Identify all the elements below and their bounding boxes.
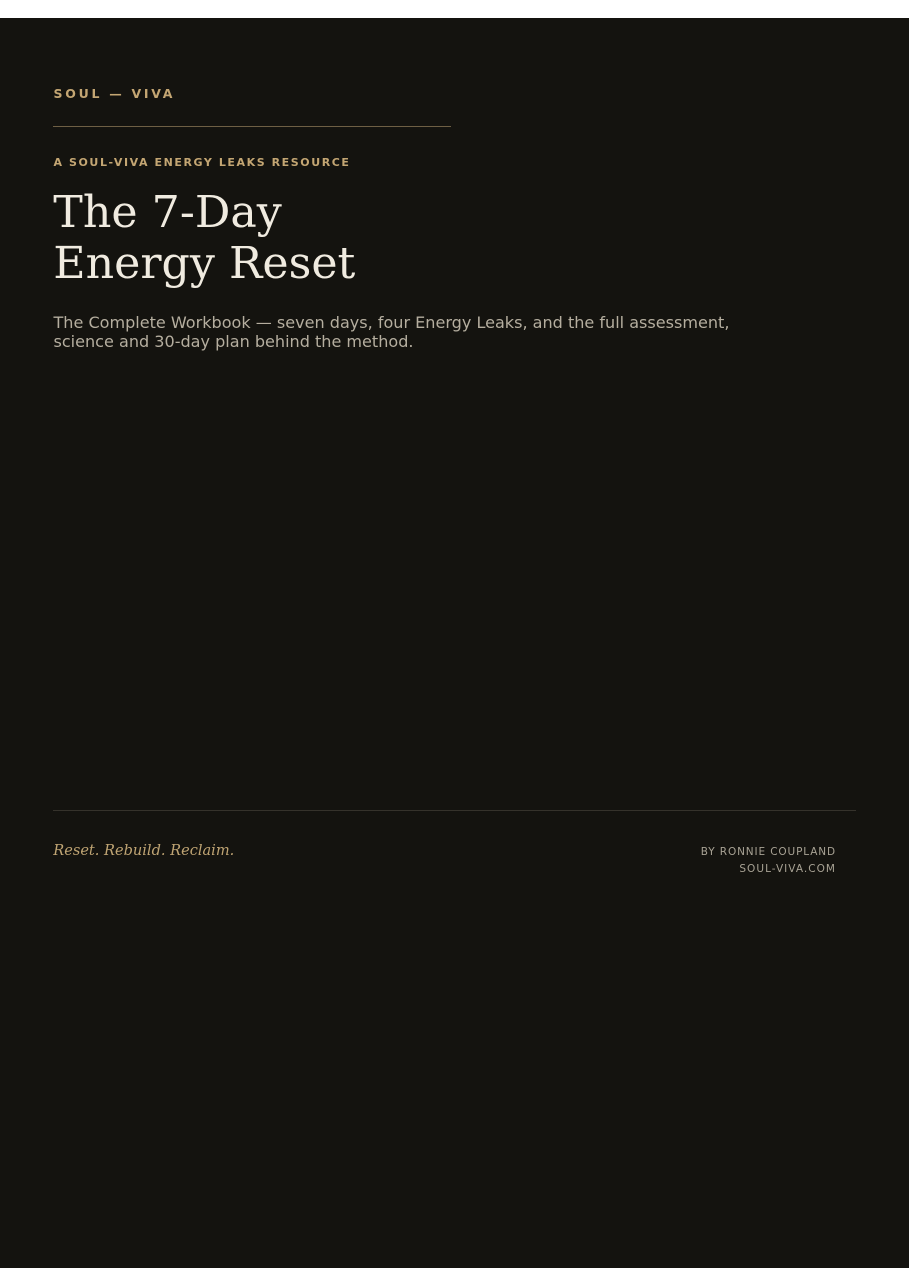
byline: BY RONNIE COUPLAND <box>701 846 836 858</box>
brand mark: SOUL — VIVA <box>54 86 175 100</box>
tagline: Reset. Rebuild. Reclaim. <box>53 842 234 859</box>
brand rule <box>53 126 451 127</box>
title <box>53 187 355 289</box>
eyebrow: A SOUL-VIVA ENERGY LEAKS RESOURCE <box>54 156 351 168</box>
title: The 7-Day <box>53 187 282 238</box>
byline: SOUL-VIVA.COM <box>739 863 836 875</box>
subtitle: The Complete Workbook — seven days, four Energy Leaks, and the full assessment, <box>54 313 729 332</box>
subtitle: science and 30-day plan behind the method. <box>54 332 414 351</box>
byline <box>701 846 836 875</box>
footer rule <box>53 810 856 811</box>
title: Energy Reset <box>53 238 355 289</box>
subtitle <box>53 313 729 351</box>
